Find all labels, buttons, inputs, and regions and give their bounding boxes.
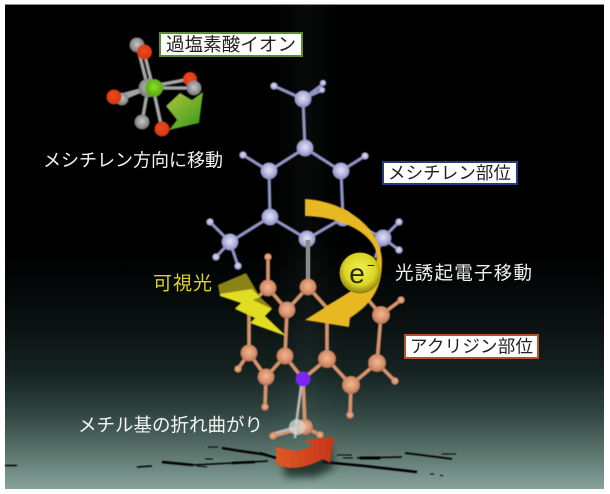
gray bent methyl bond xyxy=(272,380,302,438)
acridine bonds xyxy=(238,257,401,436)
icon: electron sphere xyxy=(340,252,380,294)
perchlorate ion molecule xyxy=(106,38,202,130)
perchlorate oxygen and chlorine atoms xyxy=(130,38,144,52)
text: visible light: 可視光 xyxy=(153,272,212,294)
acridine carbon atoms xyxy=(240,278,390,435)
icon: electron sphere: e xyxy=(349,258,365,289)
gray connecting bond xyxy=(306,240,310,287)
label: mesitylene moiety: メシチレン部位 xyxy=(388,163,511,183)
icon: red bending arrow xyxy=(276,437,334,477)
molecule: acridine moiety xyxy=(234,253,405,440)
mesitylene hydrogen atoms xyxy=(206,80,403,270)
molecule: mesitylene moiety xyxy=(206,80,403,270)
mesitylene carbon atoms xyxy=(222,90,392,250)
label: perchlorate ion: 過塩素酸イオン xyxy=(166,34,296,55)
floor cracks xyxy=(5,447,456,476)
text: move toward mesitylene: メシチレン方向に移動 xyxy=(43,150,223,170)
label: acridine moiety: アクリジン部位 xyxy=(410,336,533,356)
nitrogen atom xyxy=(296,372,310,386)
icon: lightning bolt xyxy=(218,273,286,336)
icon: curved yellow electron-transfer arrow xyxy=(305,199,382,327)
icon: green movement arrow xyxy=(154,92,203,136)
gray methyl carbon xyxy=(289,419,305,435)
mesitylene bonds xyxy=(210,84,399,266)
text: photoinduced electron transfer: 光誘起電子移動 xyxy=(395,262,532,284)
text: methyl group bending: メチル基の折れ曲がり xyxy=(78,414,263,436)
perchlorate bonds xyxy=(114,45,194,129)
icon: electron sphere: − xyxy=(367,257,375,273)
acridine hydrogen atoms xyxy=(234,253,405,440)
